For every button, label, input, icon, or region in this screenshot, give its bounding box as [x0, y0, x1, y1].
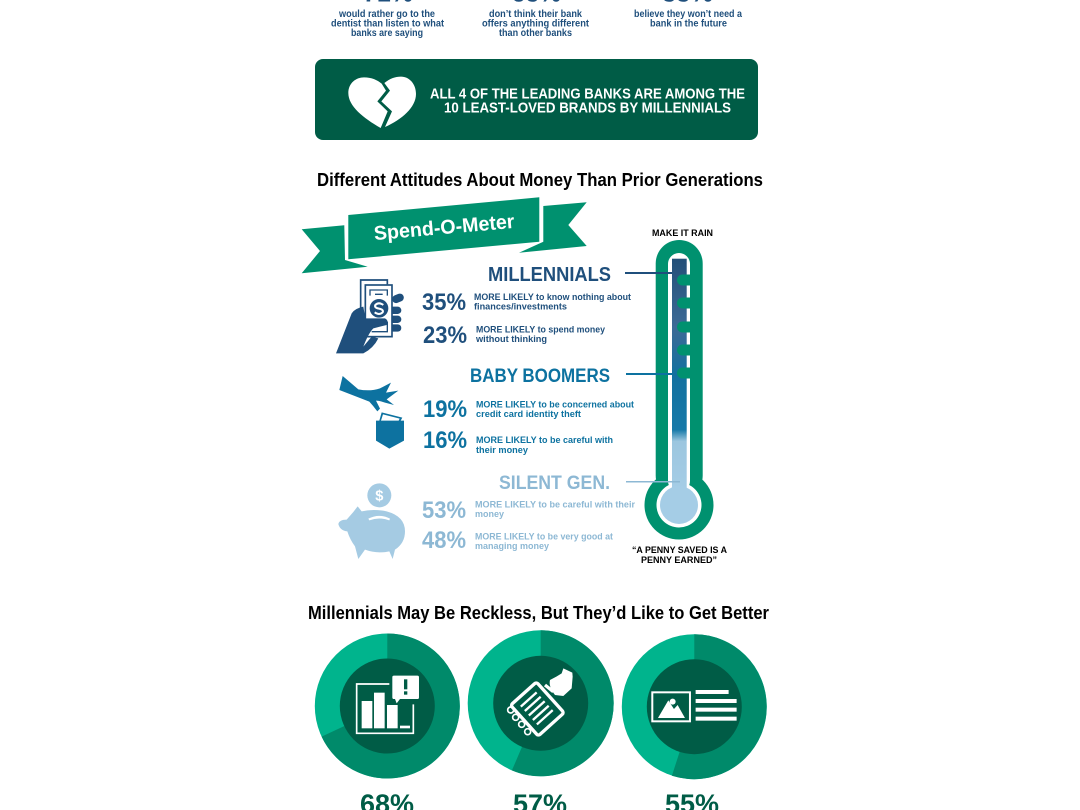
group: silent generation: MORE LIKELY to be careful with their [475, 500, 635, 510]
stat: dentist: dentist than listen to what [331, 18, 445, 30]
ribbon: Spend-O-Meter [302, 197, 587, 273]
group: silent generation: 53% [422, 497, 466, 524]
group: baby boomers [339, 366, 672, 456]
stat: no bank needed: believe they won’t need a [634, 9, 742, 20]
group: millennials: 23% [423, 322, 467, 349]
stat: no difference: than other banks [499, 28, 572, 39]
stat: dentist: would rather go to the [338, 9, 435, 20]
heading: attitudes about money: Different Attitudes About Money Than Prior Generations [317, 170, 763, 190]
heading: reckless: Millennials May Be Reckless, But They’d Like to Get Better [308, 603, 769, 623]
group: millennials: finances/investments [474, 302, 567, 312]
group: baby boomers: 19% [423, 396, 467, 423]
group: millennials: 35% [422, 289, 466, 316]
group: silent generation [338, 473, 635, 559]
group: baby boomers: their money [476, 445, 529, 456]
label: a penny saved: “A PENNY SAVED IS A [632, 545, 727, 556]
icon: hand holding money [336, 280, 405, 353]
icon: broken heart [348, 77, 416, 128]
label: a penny saved: PENNY EARNED” [641, 555, 717, 566]
group: baby boomers: BABY BOOMERS [470, 366, 610, 387]
group: millennials [336, 264, 672, 353]
label: make it rain: MAKE IT RAIN [652, 228, 713, 239]
stat: no bank needed: bank in the future [650, 18, 727, 30]
thermometer ticks [677, 274, 697, 378]
stat: no difference [482, 0, 590, 39]
group: millennials: MORE LIKELY to know nothing about [474, 292, 632, 303]
chart: thermometer [626, 240, 714, 540]
icon: image and text [652, 690, 737, 721]
donut: 68% [315, 634, 460, 810]
stat: dentist: banks are saying [351, 28, 423, 39]
callout: least-loved brands [315, 59, 758, 140]
callout text: ALL 4 OF THE LEADING BANKS ARE AMONG THE [430, 86, 745, 102]
group: silent generation: money [475, 509, 505, 520]
group: millennials: without thinking [475, 334, 547, 345]
panel: top statistics [331, 0, 742, 39]
icon: hand and pocket [339, 376, 404, 449]
group: silent generation: managing money [475, 541, 550, 552]
ribbon: Spend-O-Meter: Spend-O-Meter [373, 211, 516, 245]
callout text: 10 LEAST-LOVED BRANDS BY MILLENNIALS [444, 100, 731, 116]
group: millennials: MILLENNIALS [488, 264, 611, 286]
group: silent generation: SILENT GEN. [499, 473, 610, 494]
donut: 55% [622, 634, 767, 810]
stat: no bank needed [634, 0, 742, 30]
stat: no difference: don’t think their bank [489, 9, 582, 20]
donut: 57% [468, 630, 614, 810]
icon: notebook and pen [508, 668, 573, 736]
group: baby boomers: MORE LIKELY to be concerned about [476, 400, 635, 410]
group: millennials: MORE LIKELY to spend money [476, 324, 606, 336]
group: baby boomers: MORE LIKELY to be careful with [476, 435, 613, 446]
group: silent generation: MORE LIKELY to be very good at [475, 532, 614, 542]
icon: bar chart alert [357, 676, 419, 733]
icon: piggy bank: $ [375, 489, 383, 505]
icon: piggy bank [338, 483, 405, 559]
label: a penny saved [632, 545, 727, 566]
group: baby boomers: 16% [423, 427, 467, 454]
stat: dentist [331, 0, 445, 39]
stat: no difference: offers anything different [482, 18, 590, 30]
group: silent generation: 48% [422, 527, 466, 554]
group: baby boomers: credit card identity theft [476, 409, 582, 420]
callout text [430, 86, 745, 116]
